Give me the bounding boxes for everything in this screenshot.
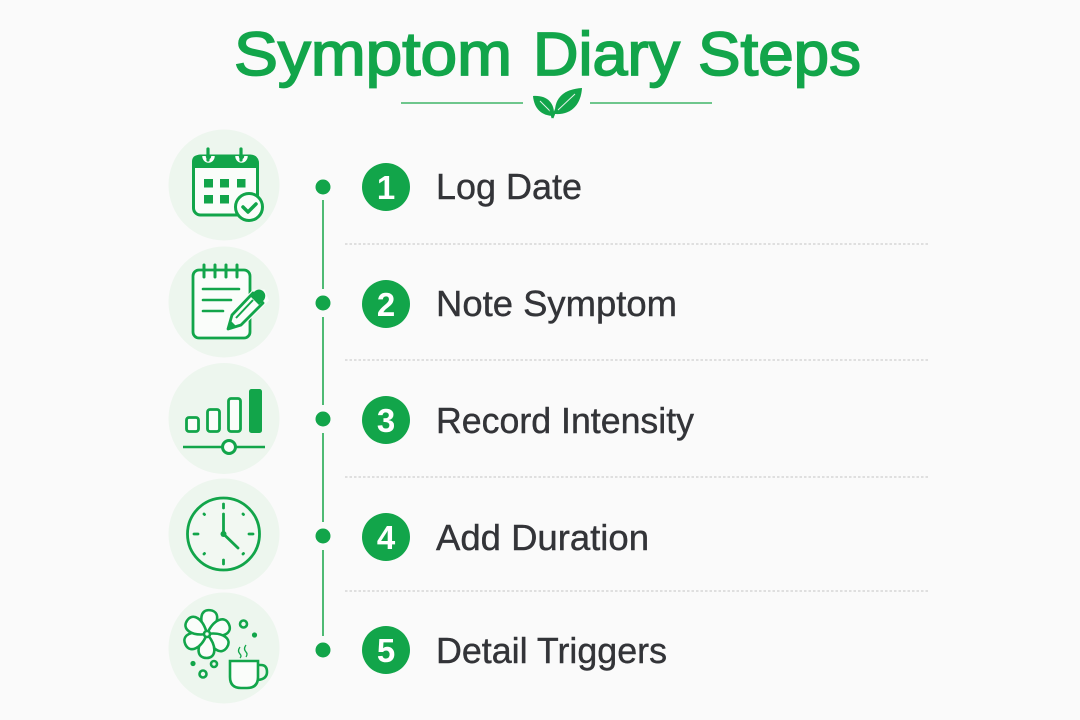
step 4	[362, 513, 649, 561]
icon: flower, particles and coffee cup	[168, 592, 280, 704]
title: Symptom	[234, 20, 512, 88]
step 1: 1	[377, 169, 395, 206]
step 1: Log Date	[436, 166, 582, 207]
step 5: Detail Triggers	[436, 630, 667, 671]
step 2: 2	[377, 286, 395, 323]
step 3: Record Intensity	[436, 400, 694, 441]
dotted row dividers	[345, 244, 929, 591]
icon: clock	[168, 478, 280, 590]
title: Steps	[698, 20, 861, 88]
step 3	[362, 396, 694, 444]
step 2	[362, 280, 677, 328]
step 5: 5	[377, 632, 395, 669]
icon: notepad with pencil	[168, 246, 280, 358]
step 1	[362, 163, 582, 211]
title	[234, 20, 861, 88]
step 4: 4	[377, 519, 396, 556]
step 3: 3	[377, 402, 395, 439]
step 4: Add Duration	[436, 517, 649, 558]
icon: calendar with check	[168, 130, 280, 240]
timeline	[316, 180, 330, 658]
step 5	[362, 626, 667, 674]
step 2: Note Symptom	[436, 283, 677, 324]
icon: intensity bars and slider	[168, 363, 280, 474]
title: Diary	[533, 20, 681, 88]
title ornament: leaf divider	[401, 88, 712, 118]
